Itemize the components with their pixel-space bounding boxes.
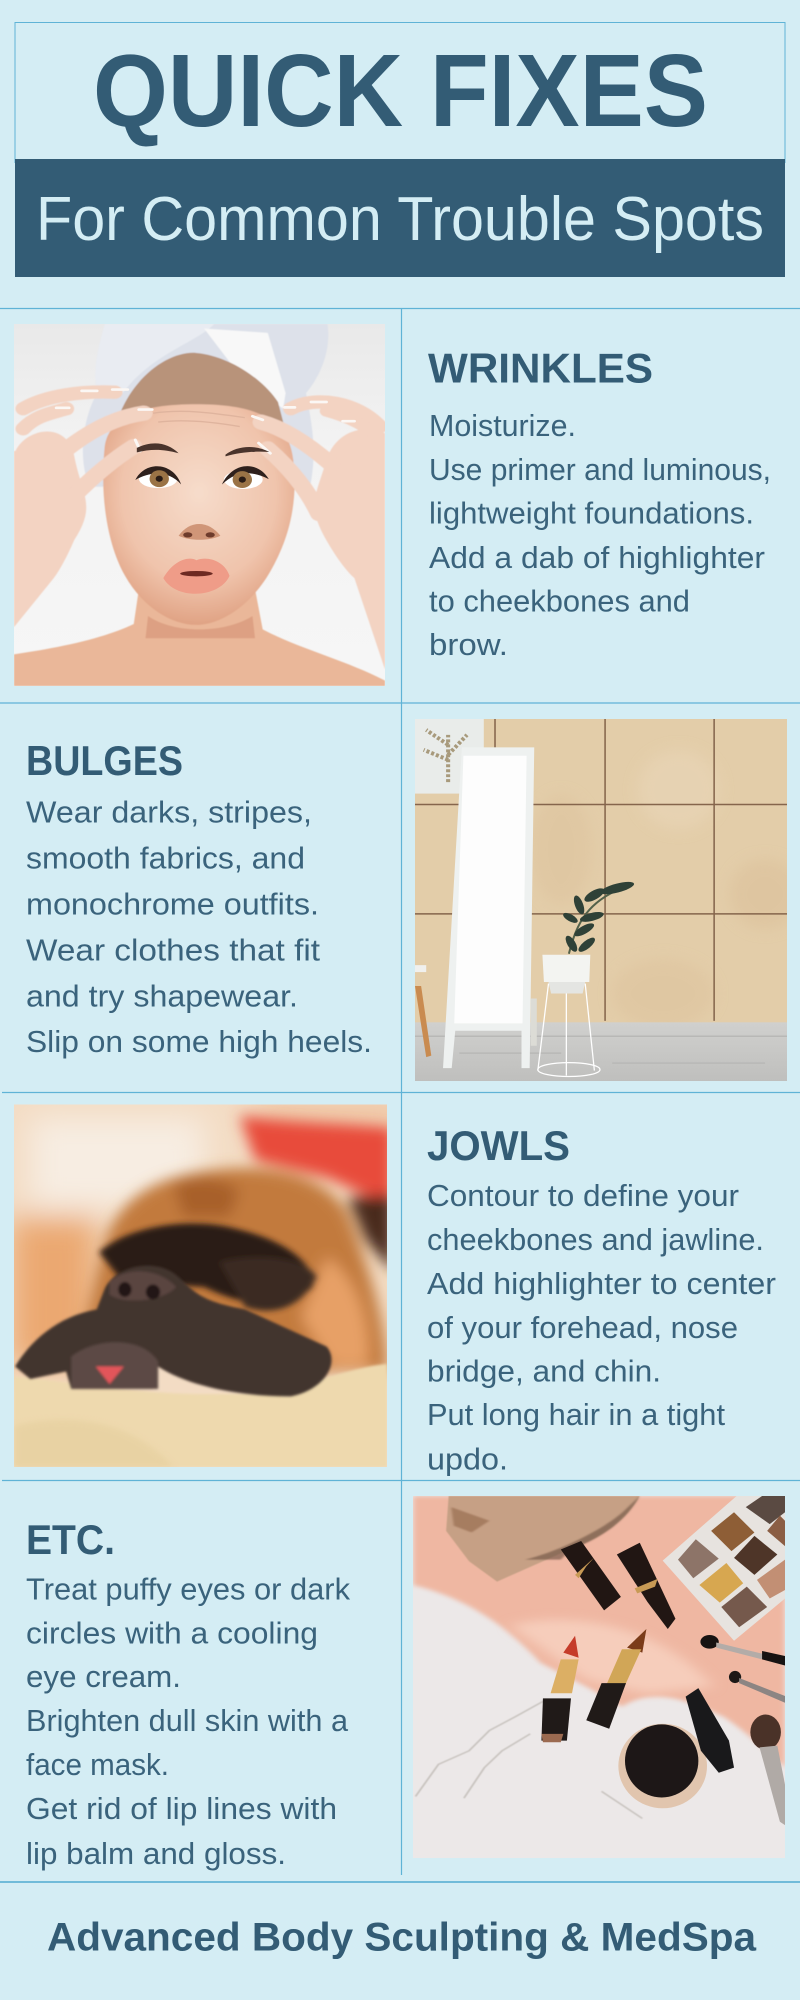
text: bulges tips: Wear darks, stripes, (26, 794, 312, 830)
picture frame (415, 719, 484, 794)
text: wrinkles tips: brow. (429, 627, 508, 662)
subtitle band (15, 159, 785, 277)
text: etc tips: lip balm and gloss. (26, 1836, 286, 1871)
text: jowls tips: Add highlighter to center (427, 1266, 776, 1301)
section: bulges (26, 737, 372, 1059)
section: etc (26, 1516, 350, 1871)
forehead wrinkles (153, 411, 245, 427)
facial features (135, 443, 269, 594)
heading: etc: ETC. (26, 1516, 115, 1563)
text: bulges tips: monochrome outfits. (26, 886, 319, 922)
hair (107, 353, 291, 451)
text: jowls tips (427, 1178, 776, 1476)
photo: mirror and plant in a room (415, 719, 787, 1081)
photo: woman touching forehead (14, 324, 385, 686)
lipstick caps (561, 1541, 675, 1629)
wall seams (415, 719, 787, 1021)
section: wrinkles (428, 344, 771, 662)
photo: makeup flat lay (413, 1496, 785, 1858)
text: wrinkles tips: to cheekbones and (429, 584, 690, 618)
text: wrinkles tips: Use primer and luminous, (429, 452, 771, 487)
compact (618, 1688, 734, 1808)
text: wrinkles tips: lightweight foundations. (429, 496, 754, 530)
text: etc tips: eye cream. (26, 1659, 181, 1694)
text: etc tips: circles with a cooling (26, 1616, 318, 1650)
heading: jowls: JOWLS (427, 1122, 570, 1169)
text: wrinkles tips (429, 408, 771, 662)
muzzle (15, 1266, 332, 1396)
right hand (315, 429, 385, 670)
text: jowls tips: cheekbones and jawline. (427, 1222, 764, 1257)
pillow (14, 1364, 387, 1467)
text: wrinkles tips: Add a dab of highlighter (429, 540, 765, 575)
marble veins (416, 1700, 642, 1818)
text: jowls tips: updo. (427, 1442, 508, 1476)
bag (446, 1496, 640, 1582)
title panel (15, 22, 785, 277)
text: wrinkles tips: Moisturize. (429, 408, 576, 443)
face (103, 404, 295, 625)
footer text: Advanced Body Sculpting & MedSpa (47, 1916, 757, 1960)
nails (56, 390, 354, 453)
photo: sleeping bulldog (14, 1104, 387, 1467)
left hand (14, 432, 86, 627)
brushes (700, 1635, 785, 1825)
subtitle: For Common Trouble Spots (36, 185, 764, 254)
grid lines (0, 308, 800, 1882)
towel (83, 324, 328, 487)
title: QUICK FIXES (93, 33, 708, 148)
text: etc tips: face mask. (26, 1747, 169, 1782)
text: bulges tips: and try shapewear. (26, 978, 298, 1014)
mirror (443, 747, 534, 1068)
text: etc tips: Treat puffy eyes or dark (26, 1572, 350, 1606)
text: bulges tips: Wear clothes that fit (26, 932, 320, 968)
heading: wrinkles: WRINKLES (428, 344, 653, 392)
pink fur (413, 1496, 785, 1768)
floor (415, 1022, 787, 1081)
text: etc tips: Brighten dull skin with a (26, 1703, 349, 1738)
brown lipstick (586, 1629, 646, 1729)
stool (415, 986, 431, 1057)
neck and shoulders (14, 589, 385, 686)
text: jowls tips: of your forehead, nose (427, 1310, 738, 1345)
text: bulges tips (26, 794, 372, 1059)
text: jowls tips: Contour to define your (427, 1178, 739, 1213)
text: jowls tips: bridge, and chin. (427, 1354, 661, 1388)
text: etc tips (26, 1572, 350, 1871)
text: bulges tips: smooth fabrics, and (26, 840, 305, 876)
text: bulges tips: Slip on some high heels. (26, 1024, 372, 1059)
palette (663, 1496, 785, 1641)
text: etc tips: Get rid of lip lines with (26, 1791, 337, 1826)
plant (538, 879, 635, 1077)
red lipstick (541, 1636, 579, 1742)
section: jowls (427, 1122, 776, 1476)
text: jowls tips: Put long hair in a tight (427, 1397, 725, 1432)
title box outline (15, 22, 785, 162)
heading: bulges: BULGES (26, 737, 183, 784)
